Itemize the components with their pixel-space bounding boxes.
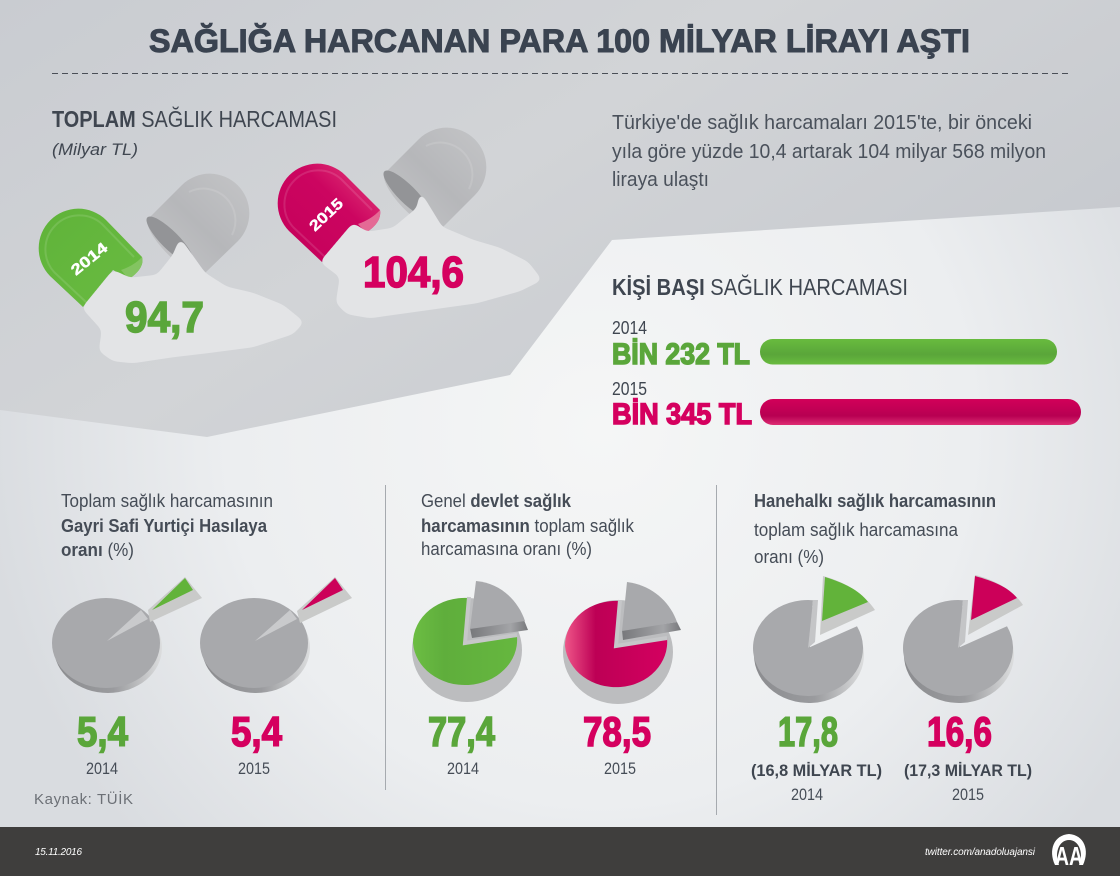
value 2015: BİN 345 TL bbox=[612, 398, 752, 431]
icon: AA logo: AA bbox=[1055, 841, 1083, 871]
dark upper background shape bbox=[0, 0, 1120, 437]
year 2015: 2015 bbox=[238, 759, 270, 778]
spilled puddle bbox=[320, 191, 542, 318]
pie 2015 bbox=[200, 577, 352, 693]
year 2015 label: 2015 bbox=[612, 379, 647, 399]
value 2015: 78,5 bbox=[583, 708, 651, 755]
heading: kişi başı: KİŞİ BAŞI SAĞLIK HARCAMASI bbox=[612, 274, 908, 300]
intro text block: yıla göre yüzde 10,4 artarak 104 milyar 568 milyon bbox=[612, 141, 1046, 163]
label 2015: 2015 bbox=[306, 195, 347, 235]
amount 2015: (17,3 MİLYAR TL) bbox=[904, 761, 1032, 780]
panel: hanehalkı sağlık harcaması bbox=[751, 491, 1032, 804]
panel: devlet sağlık harcaması bbox=[412, 491, 681, 778]
value 2015: 16,6 bbox=[927, 708, 992, 755]
description text: oranı (%) bbox=[754, 547, 824, 567]
year 2014: 2014 bbox=[447, 759, 479, 778]
date: 15.11.2016 bbox=[35, 847, 82, 858]
value 2015: 5,4 bbox=[231, 708, 283, 755]
pie 2014 bbox=[52, 577, 202, 693]
year 2015: 2015 bbox=[604, 759, 636, 778]
pie 2015 bbox=[563, 582, 681, 704]
pie 2014 bbox=[753, 576, 875, 703]
panel: GSYH oranı bbox=[52, 491, 352, 778]
spilled puddle bbox=[82, 238, 304, 363]
description text: toplam sağlık harcamasına bbox=[754, 520, 959, 540]
amount 2014: (16,8 MİLYAR TL) bbox=[751, 761, 882, 780]
label 2014: 2014 bbox=[68, 239, 112, 279]
icon: AA logo bbox=[1052, 834, 1086, 871]
unit label: (Milyar TL) bbox=[52, 140, 138, 159]
value 2014: 5,4 bbox=[77, 708, 129, 755]
pie 2014 bbox=[412, 581, 528, 702]
value 94,7: 94,7 bbox=[125, 293, 204, 342]
value 104,6: 104,6 bbox=[363, 248, 464, 297]
year 2014 label: 2014 bbox=[612, 318, 647, 338]
year 2014: 2014 bbox=[86, 759, 118, 778]
pink capsule half bbox=[278, 164, 380, 262]
panel: kişi başı sağlık harcaması bbox=[612, 274, 1081, 431]
intro text block: Türkiye'de sağlık harcamaları 2015'te, bir önceki bbox=[612, 112, 1032, 134]
twitter handle: twitter.com/anadoluajansi bbox=[925, 847, 1036, 858]
bar 2015 bbox=[760, 399, 1081, 425]
pie 2015 bbox=[903, 575, 1023, 703]
title: SAĞLIĞA HARCANAN PARA 100 MİLYAR LİRAYI AŞTI bbox=[149, 23, 970, 59]
bar 2014 bbox=[760, 339, 1057, 364]
year 2014: 2014 bbox=[791, 785, 823, 804]
value 2014: 17,8 bbox=[778, 708, 838, 755]
description text: oranı (%) bbox=[61, 540, 136, 560]
open gray capsule half bbox=[378, 128, 486, 230]
description text: harcamasına oranı (%) bbox=[421, 539, 592, 559]
green capsule half bbox=[39, 209, 142, 307]
heading: toplam sağlık harcaması: TOPLAM SAĞLIK HARCAMASI bbox=[52, 106, 337, 132]
description text: harcamasının toplam sağlık bbox=[421, 516, 641, 536]
panel: toplam sağlık harcaması bbox=[39, 106, 542, 363]
pill 2014 bbox=[39, 174, 304, 363]
description text: Toplam sağlık harcamasının bbox=[61, 491, 273, 511]
footer bar bbox=[0, 827, 1120, 876]
open gray capsule half bbox=[141, 174, 249, 274]
intro text block: liraya ulaştı bbox=[612, 169, 709, 191]
description text: Gayri Safi Yurtiçi Hasılaya bbox=[61, 516, 268, 536]
description text: Genel devlet sağlık bbox=[421, 491, 578, 511]
value 2014: BİN 232 TL bbox=[612, 338, 750, 371]
year 2015: 2015 bbox=[952, 785, 984, 804]
source: Kaynak: TÜİK bbox=[34, 790, 133, 808]
value 2014: 77,4 bbox=[428, 708, 496, 755]
description text: Hanehalkı sağlık harcamasının bbox=[754, 491, 996, 511]
pill 2015 bbox=[278, 128, 542, 318]
